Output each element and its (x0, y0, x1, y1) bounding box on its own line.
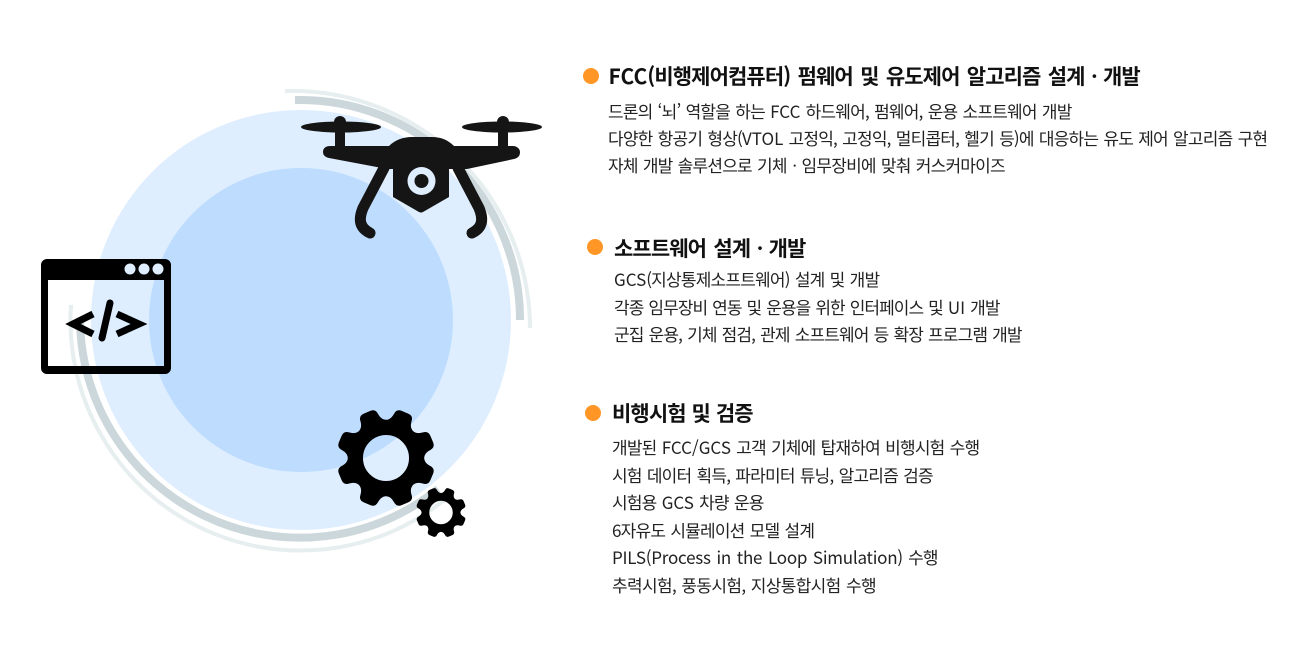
top-right arcs (285, 91, 530, 328)
icon: large gear (335, 407, 437, 509)
left propeller (301, 116, 381, 152)
text line: 개발된 FCC/GCS 고객 기체에 탑재하여 비행시험 수행 (612, 434, 979, 459)
icon: code window (41, 259, 171, 374)
text line: PILS(Process in the Loop Simulation) 수행 (612, 544, 938, 569)
right propeller (462, 116, 542, 152)
text line: GCS(지상통제소프트웨어) 설계 및 개발 (614, 266, 879, 291)
icon: drone (301, 116, 542, 233)
bullet 3 (585, 405, 601, 421)
code symbol (73, 303, 139, 338)
text line: 드론의 ‘뇌’ 역할을 하는 FCC 하드웨어, 펌웨어, 운용 소프트웨어 개발 (608, 98, 1072, 123)
bottom-left arcs (70, 305, 448, 551)
heading 1: FCC(비행제어컴퓨터) 펌웨어 및 유도제어 알고리즘 설계ㆍ개발 (608, 61, 1140, 91)
inner blue circle (149, 168, 453, 472)
bullet 2 (587, 239, 603, 255)
text line: 다양한 항공기 형상(VTOL 고정익, 고정익, 멀티콥터, 헬기 등)에 대응하는 유도 제어 알고리즘 구현 (608, 125, 1267, 150)
window dots (124, 264, 164, 274)
text line: 군집 운용, 기체 점검, 관제 소프트웨어 등 확장 프로그램 개발 (614, 321, 1022, 346)
text line: 시험 데이터 획득, 파라미터 튜닝, 알고리즘 검증 (612, 462, 933, 487)
text line: 추력시험, 풍동시험, 지상통합시험 수행 (612, 572, 876, 597)
text line: 6자유도 시뮬레이션 모델 설계 (612, 517, 814, 542)
heading 3: 비행시험 및 검증 (612, 398, 753, 428)
text line: 각종 임무장비 연동 및 운용을 위한 인터페이스 및 UI 개발 (614, 294, 1000, 319)
bullet 1 (583, 68, 599, 84)
heading 2: 소프트웨어 설계ㆍ개발 (614, 233, 805, 263)
text line: 자체 개발 솔루션으로 기체ㆍ임무장비에 맞춰 커스커마이즈 (608, 152, 1005, 177)
drone legs (360, 168, 482, 233)
outer light blue circle (91, 110, 511, 530)
icon: small gear (415, 486, 467, 539)
drone body and camera (323, 137, 520, 212)
window frame (41, 259, 171, 374)
text line: 시험용 GCS 차량 운용 (612, 489, 764, 514)
